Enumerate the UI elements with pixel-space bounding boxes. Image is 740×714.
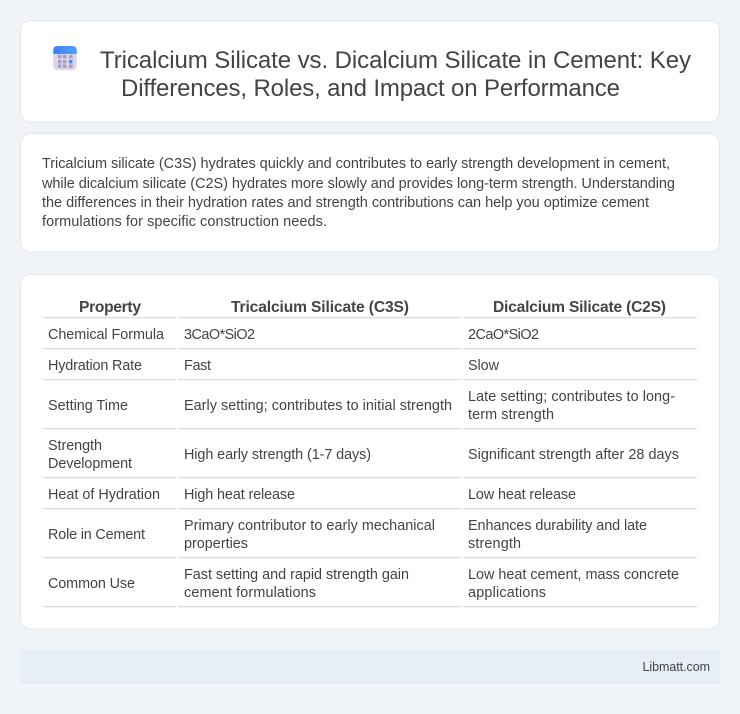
row: common use: cement formulations bbox=[184, 585, 316, 601]
row: chemical formula: Chemical Formula bbox=[48, 327, 164, 343]
panel: title card bbox=[20, 20, 720, 122]
row: heat of hydration bbox=[43, 487, 697, 509]
title: Tricalcium Silicate vs. Dicalcium Silicate in Cement: Key bbox=[100, 47, 691, 74]
row: hydration rate: Fast bbox=[184, 358, 211, 374]
row: setting time: term strength bbox=[468, 407, 554, 423]
row: hydration rate: Slow bbox=[468, 358, 500, 374]
row: chemical formula bbox=[43, 327, 697, 349]
row: chemical formula: 2CaO*SiO2 bbox=[468, 327, 539, 343]
row: role in cement: Enhances durability and late bbox=[468, 518, 647, 534]
panel: introduction text bbox=[20, 134, 720, 252]
row: heat of hydration: Heat of Hydration bbox=[48, 487, 160, 503]
row: setting time: Setting Time bbox=[48, 398, 128, 414]
table header row: Tricalcium Silicate (C3S) bbox=[231, 299, 409, 316]
row: common use bbox=[43, 567, 697, 607]
row: setting time bbox=[43, 389, 697, 429]
row: hydration rate bbox=[43, 358, 697, 380]
row: common use: Low heat cement, mass concrete bbox=[468, 567, 679, 583]
table header row: Property bbox=[79, 299, 141, 316]
row: strength development: Strength bbox=[48, 438, 102, 454]
row: setting time: Early setting; contributes to initial strength bbox=[184, 398, 452, 414]
footer bbox=[20, 650, 720, 684]
row: strength development bbox=[43, 438, 697, 478]
row: strength development: Significant strength after 28 days bbox=[468, 447, 679, 463]
row: role in cement: Primary contributor to early mechanical bbox=[184, 518, 435, 534]
panel: introduction text: Tricalcium silicate (C3S) hydrates quickly and contributes to early strength development in cement, bbox=[42, 156, 670, 172]
title: Differences, Roles, and Impact on Performance bbox=[121, 75, 620, 102]
panel: comparison table bbox=[20, 274, 720, 629]
footer: Libmatt.com bbox=[642, 660, 710, 674]
table header row bbox=[43, 299, 697, 318]
row: hydration rate: Hydration Rate bbox=[48, 358, 142, 374]
title bbox=[100, 47, 691, 102]
row: common use: applications bbox=[468, 585, 546, 601]
row: chemical formula: 3CaO*SiO2 bbox=[184, 327, 255, 343]
row: role in cement: strength bbox=[468, 536, 521, 552]
row: role in cement bbox=[43, 518, 697, 558]
panel: introduction text: formulations for specific construction needs. bbox=[42, 214, 327, 230]
row: strength development: High early strength (1-7 days) bbox=[184, 447, 371, 463]
row: common use: Fast setting and rapid strength gain bbox=[184, 567, 409, 583]
row: common use: Common Use bbox=[48, 576, 135, 592]
row: heat of hydration: Low heat release bbox=[468, 487, 576, 503]
table header row: Dicalcium Silicate (C2S) bbox=[493, 299, 666, 316]
row: heat of hydration: High heat release bbox=[184, 487, 295, 503]
row: strength development: Development bbox=[48, 456, 132, 472]
icon: calendar bbox=[53, 46, 77, 70]
row: setting time: Late setting; contributes to long- bbox=[468, 389, 675, 405]
row: role in cement: properties bbox=[184, 536, 248, 552]
panel: introduction text: while dicalcium silicate (C2S) hydrates more slowly and provides long-term strength. Understanding bbox=[41, 176, 675, 192]
row: role in cement: Role in Cement bbox=[48, 527, 145, 543]
panel: introduction text: the differences in their hydration rates and strength contributions can help you optimize cement bbox=[42, 195, 649, 211]
